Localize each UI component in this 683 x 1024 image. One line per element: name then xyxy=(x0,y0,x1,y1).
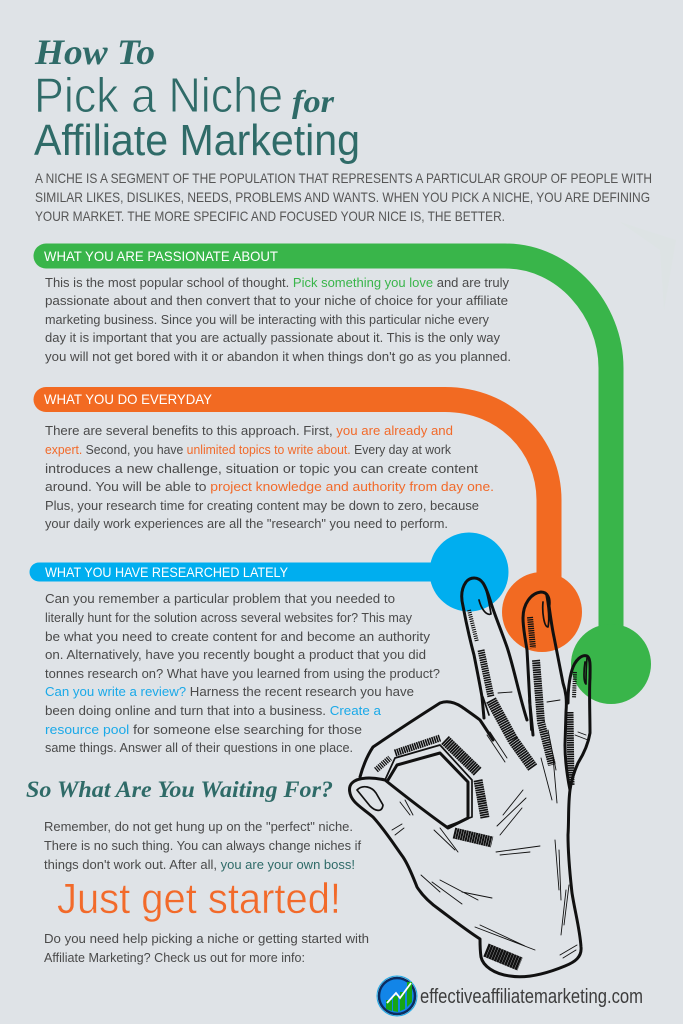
text block: researched: literally hunt for the solution across several websites for? This may xyxy=(45,610,412,625)
text block: passionate: you will not get bored with it or abandon it when things don't go as you planned. xyxy=(45,349,511,364)
title: How To xyxy=(34,32,155,72)
icon: hand making OK sign xyxy=(350,578,590,977)
logo: effectiveaffiliatemarketing.com xyxy=(377,976,643,1016)
text block: researched xyxy=(45,591,440,755)
text block: call to action: Do you need help picking a niche or getting started with xyxy=(44,931,369,946)
text block: remember: things don't work out. After all, you are your own boss! xyxy=(44,857,355,872)
title: Affiliate Marketing xyxy=(34,116,360,165)
text block: researched: Can you remember a particular problem that you needed to xyxy=(45,591,395,606)
blue bar: what you have researched lately xyxy=(39,532,508,612)
text block: passionate: day it is important that you are actually passionate about it. This is the only way xyxy=(45,330,500,345)
text block: remember: There is no such thing. You can always change niches if xyxy=(44,838,361,853)
text block: everyday xyxy=(45,423,494,531)
text block: everyday: around. You will be able to project knowledge and authority from day one. xyxy=(45,479,494,494)
text block: everyday: There are several benefits to this approach. First, you are already and xyxy=(45,423,453,438)
logo: effectiveaffiliatemarketing.com: effectiveaffiliatemarketing.com xyxy=(420,986,643,1008)
heading: so what are you waiting for: So What Are You Waiting For? xyxy=(26,777,333,802)
orange bar: what you do everyday xyxy=(44,391,582,652)
text block: passionate: passionate about and then convert that to your niche of choice for your affiliate xyxy=(45,293,508,308)
intro text xyxy=(35,170,652,224)
text block: remember xyxy=(44,819,361,872)
title: for xyxy=(292,83,335,119)
text block: researched: be what you need to create content for and become an authority xyxy=(45,629,430,644)
text block: passionate xyxy=(45,275,511,364)
intro text: YOUR MARKET. THE MORE SPECIFIC AND FOCUSED YOUR NICE IS, THE BETTER. xyxy=(35,208,505,224)
orange bar: what you do everyday: WHAT YOU DO EVERYDAY xyxy=(44,391,213,407)
text block: researched: on. Alternatively, have you recently bought a product that you did xyxy=(45,647,426,662)
text block: researched: resource pool for someone else searching for those xyxy=(45,722,362,737)
text block: call to action: Affiliate Marketing? Check us out for more info: xyxy=(44,950,305,965)
text block: researched: tonnes research on? What have you learned from using the product? xyxy=(45,666,440,681)
callout: just get started: Just get started! xyxy=(57,875,341,923)
title: Pick a Niche xyxy=(34,69,283,123)
green bar: what you are passionate about: WHAT YOU ARE PASSIONATE ABOUT xyxy=(44,248,278,264)
icon: growth chart badge xyxy=(377,976,417,1016)
text block: remember: Remember, do not get hung up on the "perfect" niche. xyxy=(44,819,353,834)
text block: everyday: introduces a new challenge, situation or topic you can create content xyxy=(45,461,478,476)
blue bar: what you have researched lately: WHAT YOU HAVE RESEARCHED LATELY xyxy=(45,564,289,580)
text block: passionate: This is the most popular school of thought. Pick something you love and are truly xyxy=(45,275,509,290)
icon: hand shading hatches xyxy=(376,610,575,964)
green bar: what you are passionate about xyxy=(44,248,651,704)
title xyxy=(34,32,360,165)
text block: everyday: expert. Second, you have unlimited topics to write about. Every day at work xyxy=(45,442,451,457)
text block: call to action xyxy=(44,931,369,965)
text block: everyday: Plus, your research time for creating content may be down to zero, because xyxy=(45,498,479,513)
text block: passionate: marketing business. Since you will be interacting with this particular niche every xyxy=(45,312,489,327)
text block: researched: same things. Answer all of their questions in one place. xyxy=(45,740,353,755)
text block: researched: been doing online and turn that into a business. Create a xyxy=(45,703,382,718)
text block: everyday: your daily work experiences are all the "research" you need to perform. xyxy=(45,516,448,531)
text block: researched: Can you write a review? Harness the recent research you have xyxy=(45,684,414,699)
